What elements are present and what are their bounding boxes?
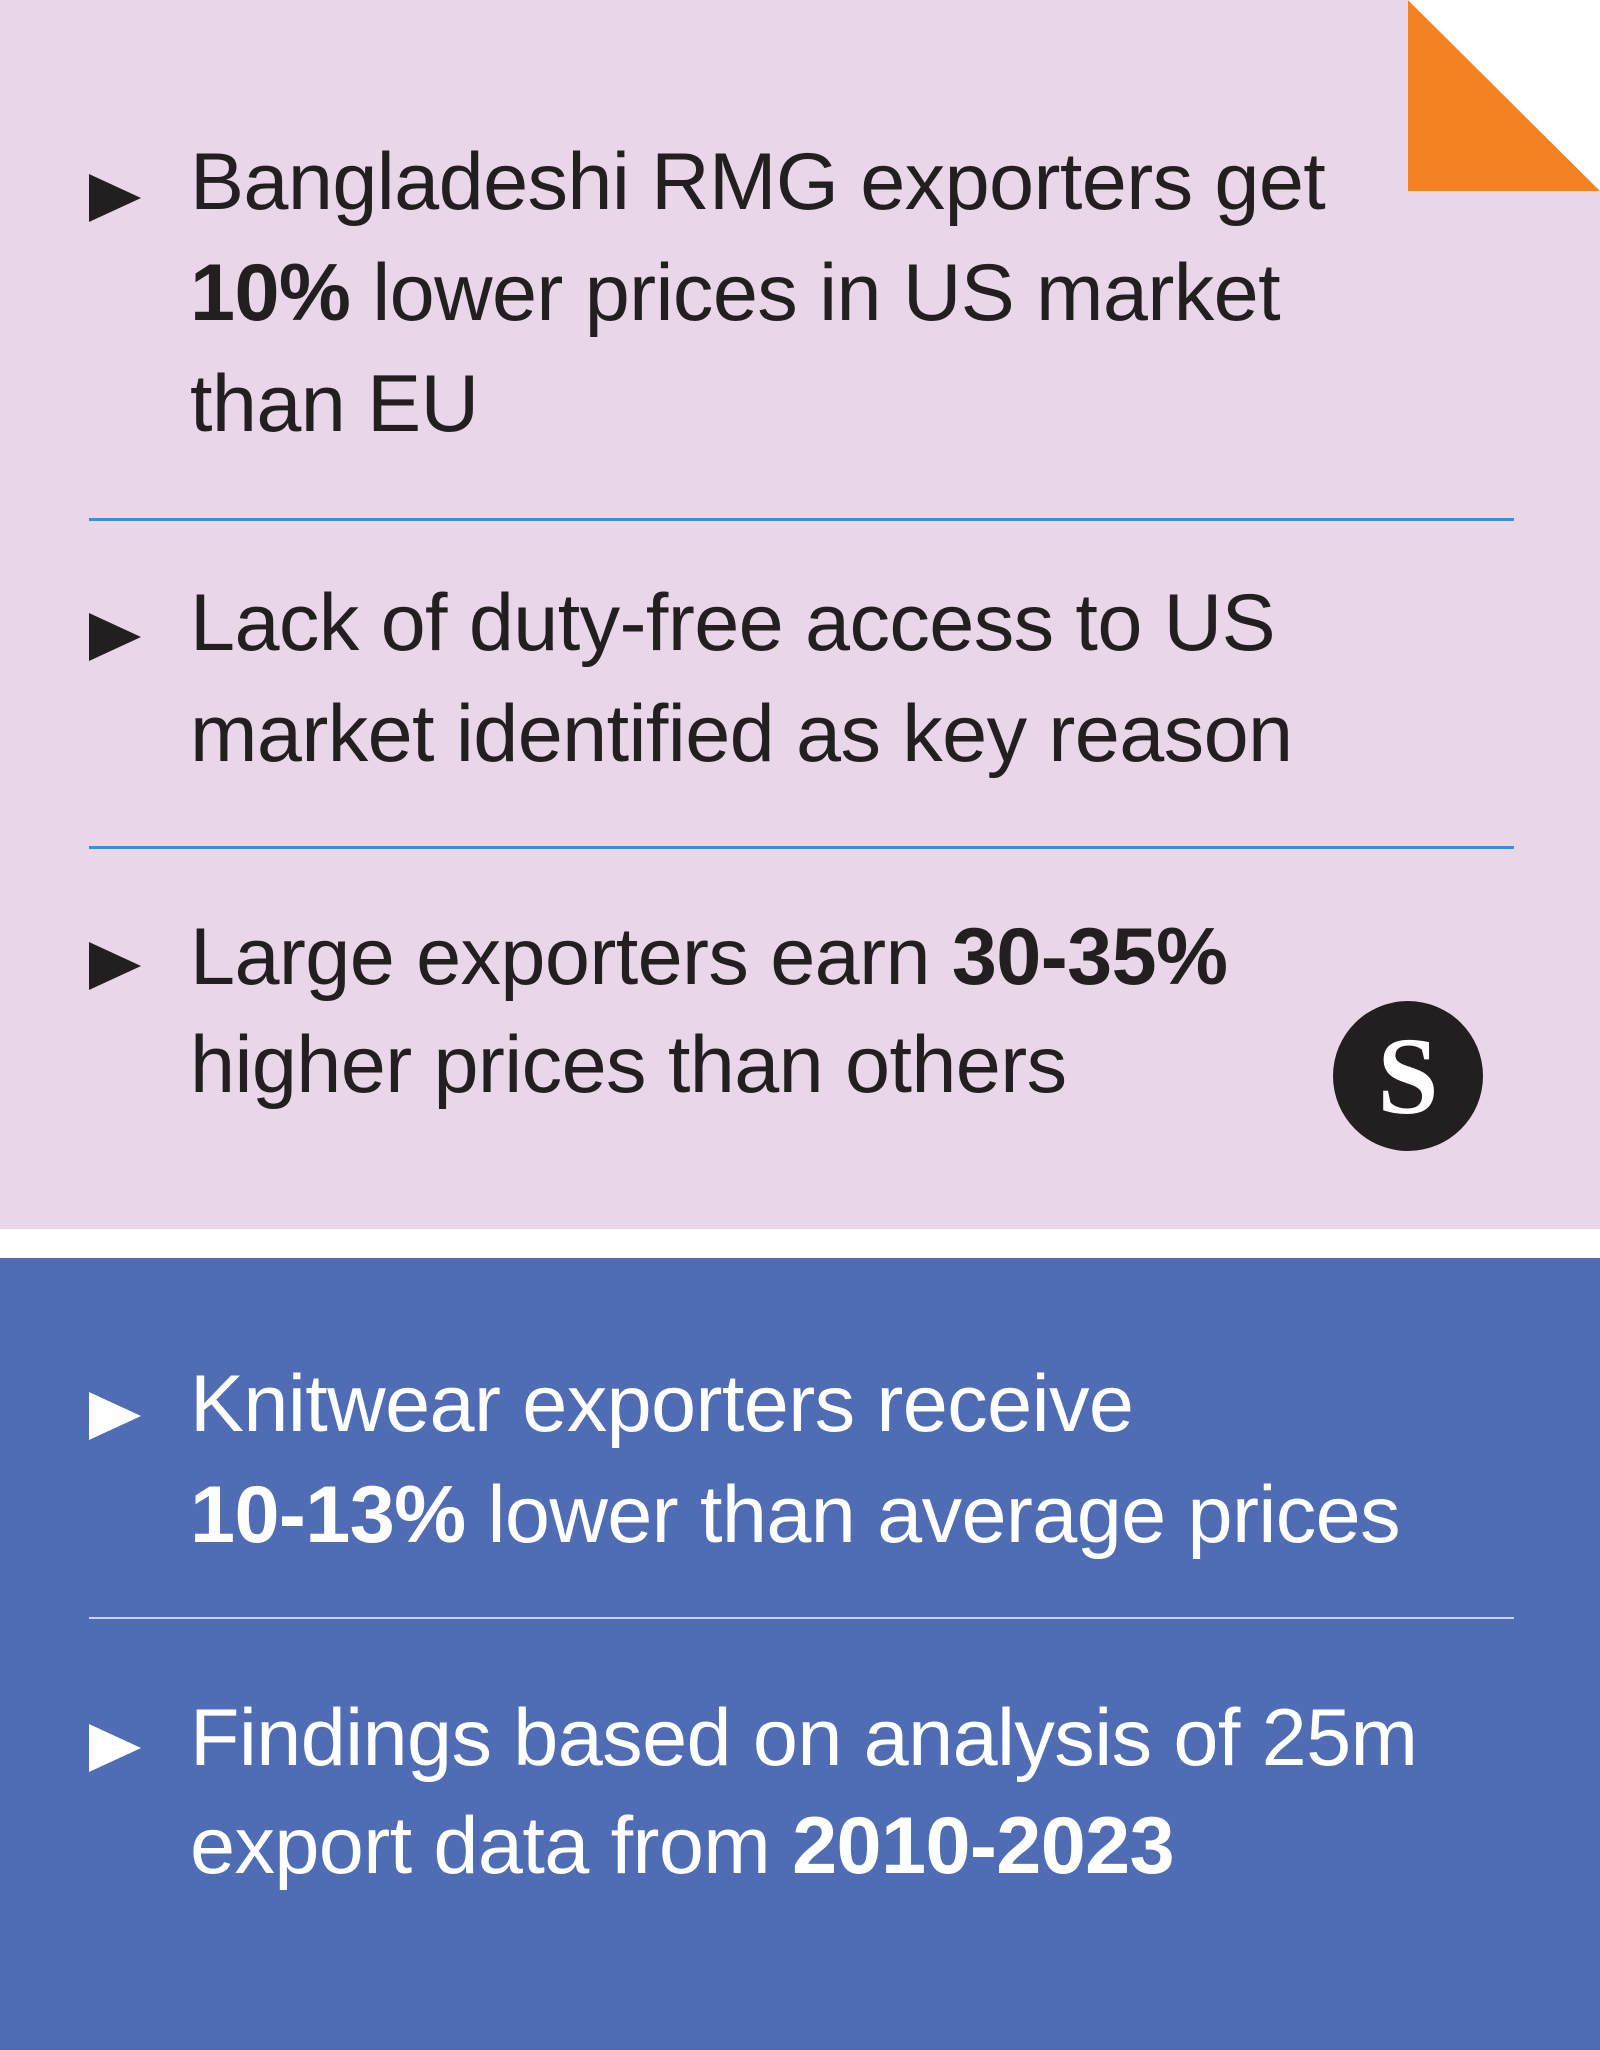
item: large exporters: Large exporters earn 30-35% [190,912,1227,1002]
item: knitwear: 10-13% lower than average prices [190,1470,1400,1560]
item: data basis: Findings based on analysis of 25m [190,1693,1417,1783]
item: US prices [89,137,1326,449]
icon: orange folded corner [1408,0,1600,191]
panel: blue findings [0,1258,1600,2050]
item: large exporters: higher prices than others [190,1020,1067,1110]
item: US prices: 10% lower prices in US market [190,248,1280,338]
item: US prices: Bangladeshi RMG exporters get [190,137,1325,227]
item: knitwear [89,1359,1400,1560]
item: duty-free access [89,578,1292,779]
item: knitwear: Knitwear exporters receive [190,1359,1133,1449]
item: duty-free access: market identified as key reason [190,689,1292,779]
item: US prices: than EU [190,359,478,449]
item: data basis: export data from 2010-2023 [190,1801,1174,1891]
icon: logo: S [1377,1015,1439,1137]
item: duty-free access: Lack of duty-free access to US [190,578,1275,668]
item: large exporters [89,912,1227,1110]
icon: logo [1333,1001,1483,1151]
item: data basis [89,1693,1417,1891]
panel: pink key findings [0,0,1600,1229]
